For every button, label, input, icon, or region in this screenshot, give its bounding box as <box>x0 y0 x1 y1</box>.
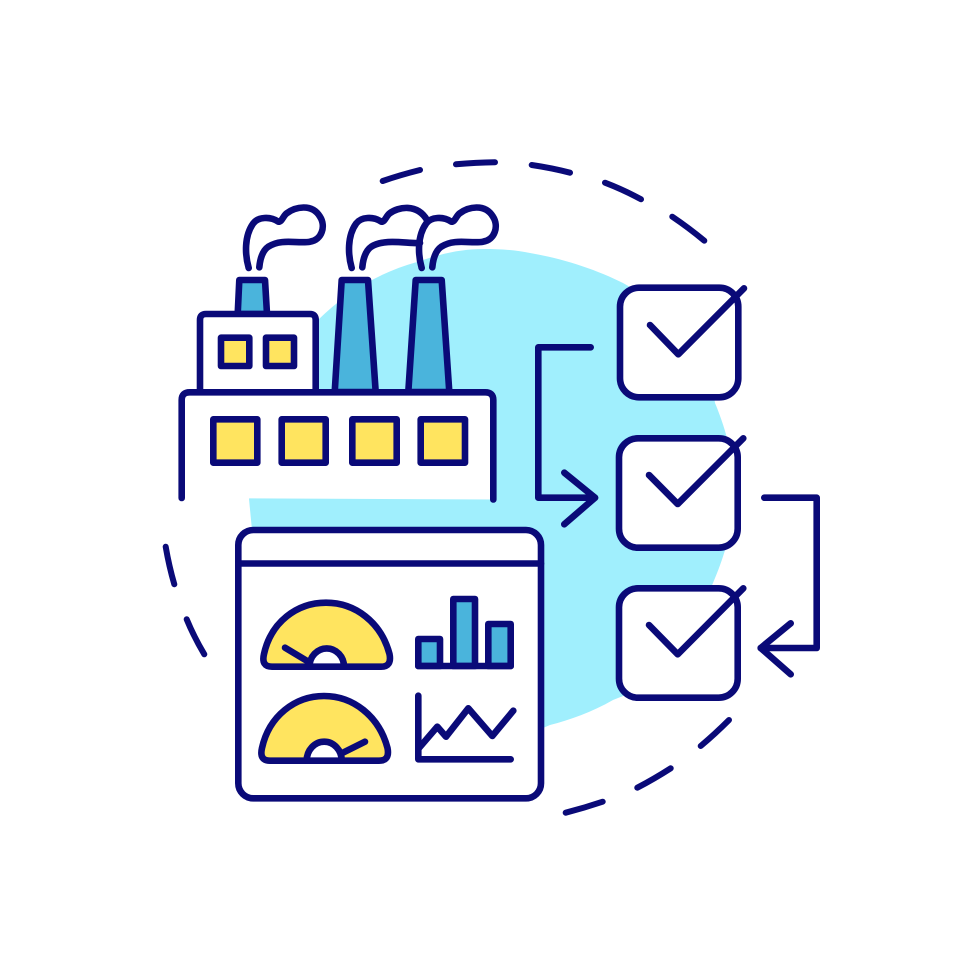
top gauge <box>263 603 390 667</box>
line chart <box>418 696 513 759</box>
factory <box>182 207 496 500</box>
main windows <box>213 419 257 463</box>
dashed circle <box>166 162 729 813</box>
dashboard panel <box>238 530 541 798</box>
smoke right <box>419 207 496 268</box>
main building <box>182 392 493 500</box>
bottom gauge <box>261 696 388 761</box>
small windows <box>221 338 249 366</box>
checkbox 2 <box>619 438 743 548</box>
smoke middle <box>349 208 427 268</box>
checkbox 3 <box>619 588 743 698</box>
arrow: checkbox 2 to checkbox 3 <box>761 498 817 674</box>
background blue blob <box>249 249 734 740</box>
bar chart <box>418 599 511 666</box>
right chimney <box>408 280 449 392</box>
smoke left <box>246 207 323 268</box>
middle chimney <box>335 280 376 392</box>
small chimney <box>238 280 267 314</box>
small building <box>200 314 316 392</box>
arrow: factory to checklist <box>538 347 595 524</box>
checkbox 1 <box>620 288 744 397</box>
